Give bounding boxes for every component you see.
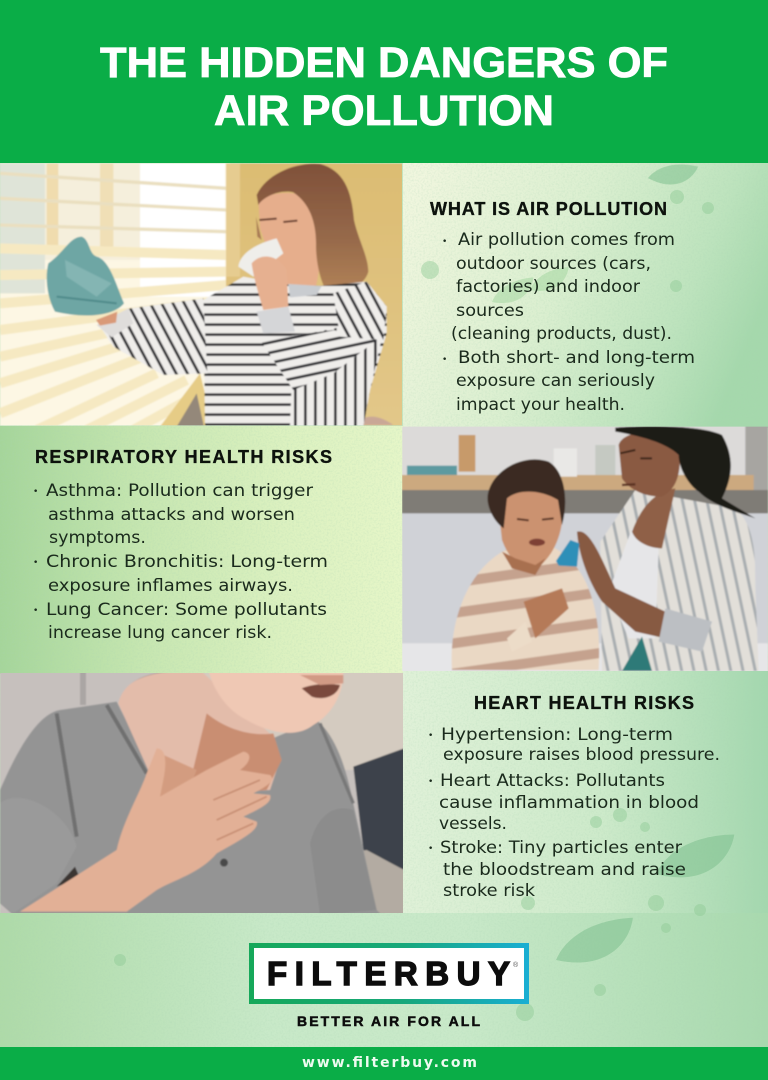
chin and mouth [208,670,343,733]
hair [257,164,368,299]
tissue and hand [238,238,283,277]
bullet list: definition: outdoor sources (cars, [456,254,651,274]
bullet list: heart risks: • [428,777,433,787]
bullet list: definition: Both short- and long-term [458,348,695,368]
bullet list: definition: (cleaning products, dust). [451,324,672,344]
bullet list: respiratory risks: Asthma: Pollution can trigger [46,481,314,501]
header banner [0,0,768,163]
bullet list: respiratory risks: Lung Cancer: Some pollutants [46,600,327,620]
bullet list: heart risks: exposure raises blood pressure. [443,745,720,765]
bullet list: heart risks: the bloodstream and raise [443,860,686,880]
photo: woman holding her chest [0,670,404,915]
sweater torso [203,277,387,427]
bullet list: respiratory risks: • [33,558,38,568]
photo: mother helping coughing boy with inhaler [402,425,768,675]
tagline: BETTER AIR FOR ALL [297,1013,480,1029]
bullet list: definition: exposure can seriously [456,371,655,391]
inhaler [556,540,579,567]
face [258,193,320,290]
bullet list: respiratory risks [33,481,328,643]
hand [20,748,272,912]
photo: woman sneezing by window blinds [0,160,404,430]
heading: respiratory health risks: RESPIRATORY HEALTH RISKS [35,447,332,467]
footer bar [0,1047,768,1080]
bullet list: respiratory risks: • [33,487,38,497]
grey shirt [0,702,382,915]
bullet list: heart risks: Heart Attacks: Pollutants [440,771,665,791]
boy [452,459,599,670]
bullet list: respiratory risks: asthma attacks and worsen [48,505,295,525]
logo: Filterbuy [252,946,526,1002]
bullet list: heart risks: cause inflammation in blood [439,793,699,813]
bullet list: definition: • [442,237,447,247]
bullet list: respiratory risks: Chronic Bronchitis: Long-term [46,552,328,572]
decorative leaves and particles [114,160,738,1021]
title: THE HIDDEN DANGERS OF [100,39,668,87]
title: AIR POLLUTION [214,87,554,135]
bullet list: respiratory risks: symptoms. [49,528,146,548]
text panel: heart health risks [428,693,720,901]
heading: heart health risks: HEART HEALTH RISKS [474,693,694,713]
bullet list: definition: • [442,355,447,365]
bullet list: heart risks: • [428,731,433,741]
bullet list: heart risks: vessels. [439,814,507,834]
bullet list: definition: Air pollution comes from [458,230,675,250]
bullet list: respiratory risks: increase lung cancer risk. [48,623,272,643]
title [100,39,668,135]
neck and chest [118,670,280,797]
bullet list: definition: impact your health. [456,395,625,415]
website url: www.filterbuy.com [302,1055,477,1071]
bullet list: heart risks: stroke risk [443,881,535,901]
text panel: respiratory health risks [33,447,332,643]
bullet list: heart risks: • [428,844,433,854]
outstretched arm [100,298,207,375]
teal cloth [47,237,124,315]
mother [577,426,759,671]
bullet list: heart risks [428,725,720,901]
bullet list: definition: sources [456,301,524,321]
bullet list: definition: factories) and indoor [456,277,641,297]
bullet list: respiratory risks: • [33,606,38,616]
heading: what is air pollution: WHAT IS AIR POLLUTION [430,199,667,219]
logo: Filterbuy: FILTERBUY [267,955,510,992]
logo: Filterbuy: ® [513,961,519,969]
bullet list: definition [442,230,695,415]
bullet list: respiratory risks: exposure inflames airways. [48,576,293,596]
bullet list: heart risks: Stroke: Tiny particles enter [440,838,683,858]
bullet list: heart risks: Hypertension: Long-term [441,725,673,745]
text panel: what is air pollution [430,199,695,415]
